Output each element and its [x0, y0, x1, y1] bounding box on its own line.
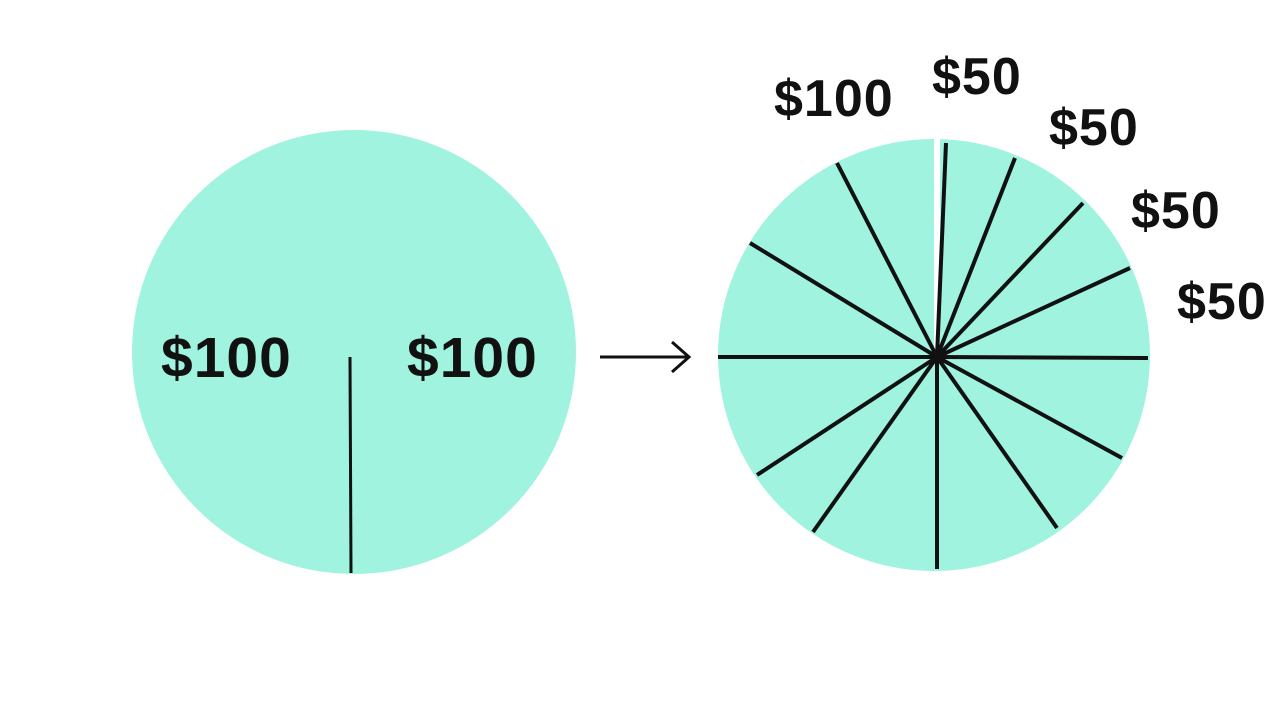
labels: right pie: $50	[1177, 273, 1267, 331]
label: right $100: $100	[407, 326, 538, 390]
arrow	[600, 342, 689, 372]
labels: right pie: $50	[1049, 99, 1139, 157]
left pie: two halves	[132, 130, 576, 574]
right pie: many slices	[718, 138, 1150, 571]
labels: right pie: $50	[1131, 182, 1221, 240]
labels: right pie: $100	[774, 70, 894, 128]
labels: right pie	[774, 48, 1267, 331]
label: left $100: $100	[161, 326, 292, 390]
labels: right pie: $50	[932, 48, 1022, 106]
